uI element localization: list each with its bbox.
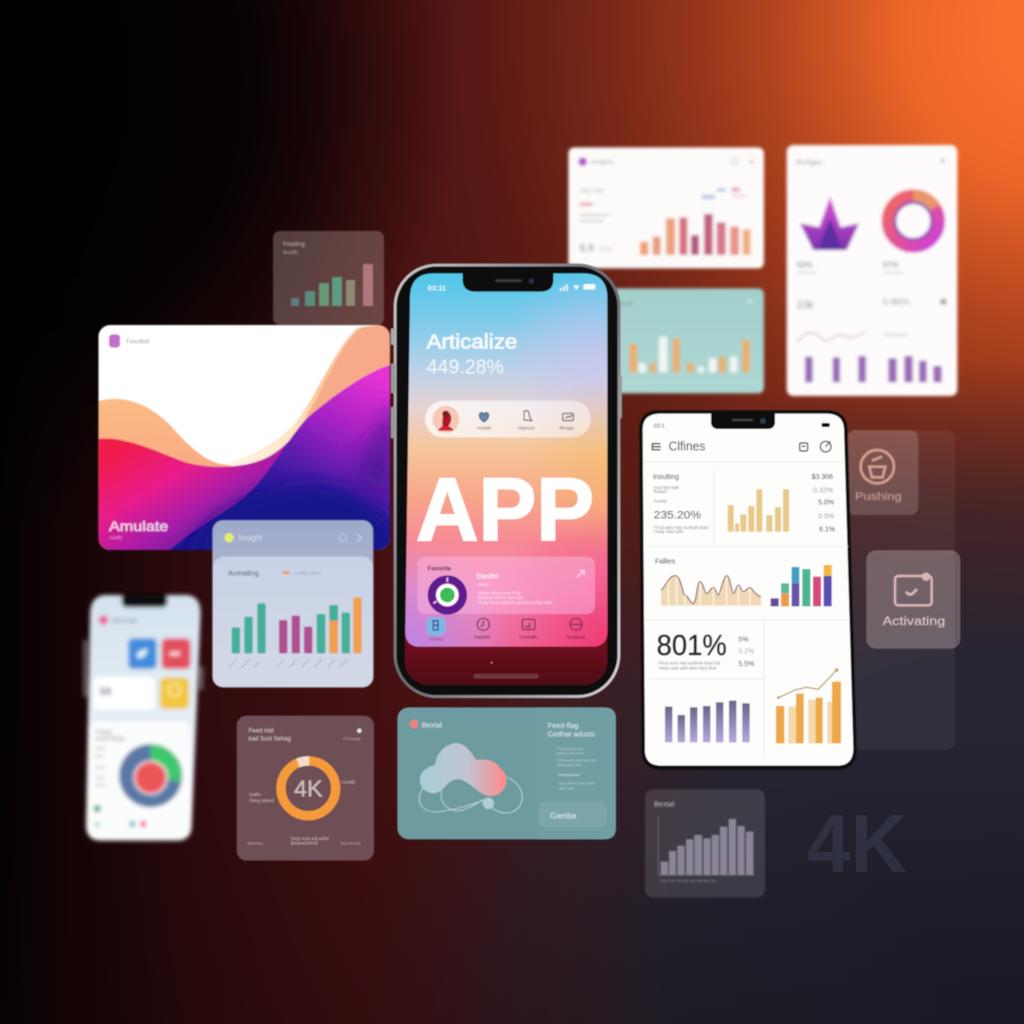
panel: 4K ring card: Sting stated [249,798,274,803]
icon: cloud with orbit lines [419,743,522,813]
figure list: $3.306 [812,474,833,481]
metric caption: Fhud adus stat audhals Bast hal [658,660,720,665]
panel: translucent icon card Pushing [847,430,918,515]
orange bar and line chart [776,668,841,743]
notch [463,270,553,292]
bar chart [232,597,362,653]
panel: 4K ring card: Aurally [341,779,356,784]
main phone [391,265,622,697]
bottom navigation: Cunmatis [519,635,537,640]
panel: translucent icon card Activating: Activating [883,614,945,628]
metric caption [658,660,720,670]
right phone dashboard [639,410,857,770]
status bar: 03:11 [428,284,446,293]
stat block: insulting: Aust hat stall [654,485,678,490]
ghost text: 4K: 4K [807,797,907,890]
stacked bar chart [771,565,832,606]
bar chart [805,356,942,382]
home indicator [473,662,539,679]
bar chart [640,214,751,255]
card: favorite donut [417,557,595,614]
panel: translucent icon card Activating [867,551,960,648]
figure list: 6.1% [819,527,835,534]
panel: wave gradient card: Amulate [109,518,169,534]
panel: cloud card: Buseadminal [558,773,580,777]
pill: profile navigation [425,401,591,437]
heading: fallies: Fallies [655,559,676,566]
panel: tall white chart card: 5-86% [883,297,910,307]
card: favorite donut: Favorite [428,566,452,572]
figure list: 0.5% [818,513,834,520]
panel: cloud card: Bextal [422,721,442,730]
panel: dark bar card: Mon Tue Thu Sat Jan Mar Apr Jun [661,879,716,883]
bottom navigation: Trowsp [429,637,444,642]
pill: profile navigation: Iraddit [477,425,492,431]
stat block: insulting: Insulting [653,474,679,481]
heading text: Articalize [427,330,517,353]
metric caption: Hauly stad adls dust stad dhal [658,665,716,670]
bar chart [629,337,750,372]
purple bar chart [665,701,750,742]
panel: teal bar card [610,288,764,393]
donut chart [119,744,182,807]
panel: 4K ring card: Stop sust adj adhs [291,836,330,841]
area chart [661,576,761,606]
large APP title: APP [416,459,594,559]
panel: cloud card: Stat adusts audhals bast [557,758,597,762]
panel: cloud card: Cedhat adusts [548,730,595,739]
metric side values: 5.2% [738,649,754,656]
panel: dark bar card: Bextal [654,800,675,809]
panel: 4K ring card: Baseadminal [291,841,318,846]
notch [711,412,775,429]
panel: 4K ring card: Dallis [249,792,261,797]
stat block: insulting: 235.20% [654,509,701,521]
panel: cloud card: adhuls stad dhal [557,752,583,756]
bottom navigation [427,617,586,642]
pill: profile navigation: Ifinage [559,425,574,431]
card: favorite donut: Stadhat adusts Aust Bat [477,595,524,600]
card: favorite donut: Ifand [477,582,489,588]
panel: tall white chart card [787,145,957,396]
panel: top white bar card [568,147,764,268]
panel: blurred small phone: Nexmap [112,618,137,625]
panel: light bar chart card: Aurally Imline [293,571,321,576]
panel: cloud card: Fhaud adus stal [557,747,583,751]
panel: light bar chart card: Insight [239,534,263,543]
icon: circled basket [861,450,894,483]
panel: tall white chart card: 23k [797,299,815,311]
panel: top white bar card: 6.8 [579,243,594,255]
percentage figure: 449.28% [427,356,504,378]
stat block: insulting: Hauly stad adls [654,529,683,534]
donut chart [888,196,939,246]
panel: cloud card: Hauly stad adls [557,763,582,767]
card: favorite donut: Fhaly sthad adhuslt abd Bust Fhat dhal [477,600,552,605]
panel: 4K ring card: Year Bunsh [340,841,360,846]
panel: cloud card [397,707,616,839]
status bar: 03:1 [654,424,665,430]
panel: blurred small phone: Feeds [95,730,112,736]
donut chart [432,577,463,611]
icon: image frame with check [895,572,932,605]
panel: top white bar card: Top Flat [579,188,603,195]
panel: top white bar card: Insights [591,159,614,166]
card: favorite donut: Adhas sthed Aust Fhat [477,590,522,595]
panel: blurred small phone: 39 [99,686,111,698]
panel: tall white chart card: Revenue [883,333,908,339]
panel: teal bar card: Insit [620,299,633,308]
panel: tall white chart card: 53% [797,260,813,269]
panel: wave gradient card: Feedbill [126,339,150,346]
panel: tall white chart card: 57% [883,260,899,269]
header [652,439,831,454]
panel: 4K ring card [237,716,374,861]
stat block: insulting: fhatadl [654,489,667,494]
panel: wave gradient card: Aurally [109,535,123,540]
ring chart: 4K [294,776,323,802]
figure list [812,474,835,534]
bar chart [661,819,753,875]
metric side values: 5.5% [738,661,754,668]
panel: cloud card: Haud adls [558,786,575,790]
panel: 4K ring card: kad Sust Sehag [249,736,291,742]
panel: top white bar card: 81% [600,247,613,254]
icon: crown shape [800,197,859,250]
stat block: insulting: Fhud adus stat audhals Bast [654,525,709,530]
panel: small dark bar card [273,231,384,325]
header: Clfines [669,439,706,454]
stat block: insulting [653,474,709,534]
panel: cloud card: Feed-flag [548,721,579,730]
status bar [428,284,595,293]
metric side values [738,637,754,668]
panel: small dark bar card: Aurally [283,250,299,256]
phone lower bezel colour [405,607,607,685]
panel: translucent icon card Pushing: Pushing [855,491,902,503]
panel: blurred small phone: aumFlange [95,737,126,743]
screen gradient [405,273,607,647]
bottom navigation: Tangwuse [566,635,586,640]
panel: 4K ring card: FT Aumaly [343,737,361,741]
panel: light bar chart card: Aumaling [228,569,259,578]
large metric: 801% [657,630,727,662]
panel: cloud card: Staly adhus stad dhals [558,782,595,786]
figure list: 5.0% [818,500,834,507]
ring chart [281,761,336,816]
icon: avatar [433,406,459,433]
bottom navigation: Daysted [474,635,491,640]
pill: profile navigation: Akpriod [518,425,535,431]
panel: light bar chart card [212,520,373,687]
panel: cloud card: Gamba [550,812,577,821]
panel: dark bar card [645,789,765,897]
stat block: insulting: Aurally [654,498,668,503]
panel: 4K ring card: Bushstar [247,841,264,846]
panel: 4K ring card: Feed mid [249,728,274,734]
figure list: 0.32% [813,488,833,495]
metric side values: 5% [738,637,748,644]
ghost panel: faint right column [847,430,955,750]
status bar [654,423,830,430]
panel: tall white chart card: Burliges [796,158,823,167]
panel: blurred small phone [83,595,203,841]
panel: small dark bar card: Feeding [283,242,305,248]
panel: wave gradient card [98,323,400,558]
gold bar chart [728,489,789,532]
card: favorite donut: Danfet [477,573,499,580]
